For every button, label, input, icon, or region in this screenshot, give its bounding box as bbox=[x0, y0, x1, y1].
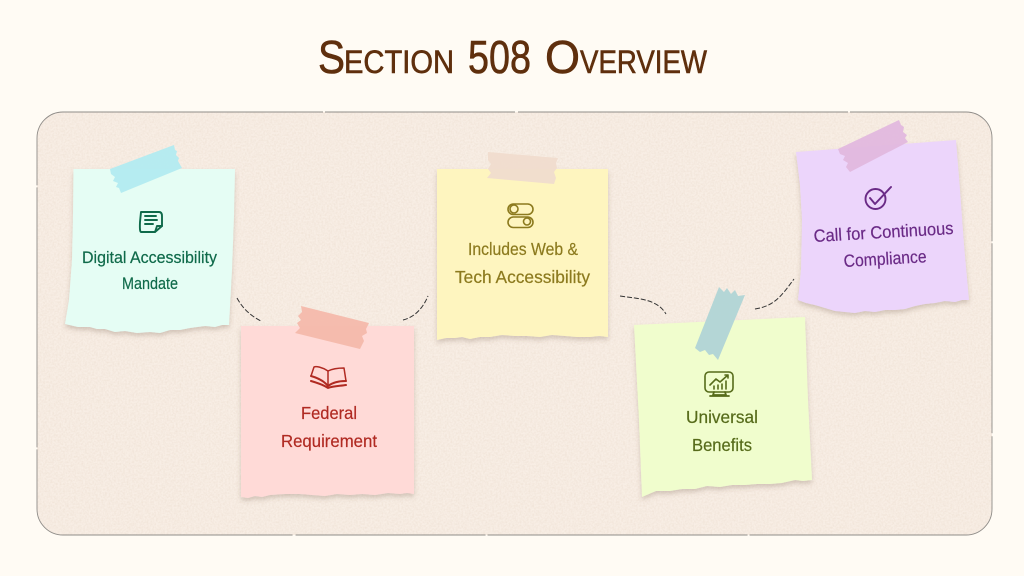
tape bbox=[487, 152, 558, 184]
connector: note 4 to note 5 bbox=[755, 279, 794, 309]
note paper bbox=[241, 326, 414, 498]
title: 508 bbox=[468, 31, 531, 83]
label: Universal bbox=[686, 407, 758, 427]
icon: check circle bbox=[866, 187, 891, 209]
label: Mandate bbox=[122, 274, 178, 293]
panel: note Call for Continuous Compliance bbox=[796, 120, 969, 313]
panel: note Includes Web and Tech Accessibility bbox=[437, 152, 608, 340]
label: Federal bbox=[301, 403, 357, 423]
title: ECTION bbox=[344, 44, 454, 80]
label: Digital Accessibility bbox=[82, 248, 217, 267]
tape bbox=[295, 306, 369, 349]
icon: monitor chart bbox=[705, 372, 733, 396]
label: Benefits bbox=[692, 435, 752, 455]
note paper bbox=[796, 140, 969, 313]
icon: document bbox=[140, 212, 162, 232]
label bbox=[813, 218, 954, 271]
connector: note 2 to note 3 bbox=[403, 296, 428, 320]
connector: note 3 to note 4 bbox=[620, 296, 666, 314]
label: Requirement bbox=[281, 431, 377, 451]
title: S bbox=[318, 31, 345, 83]
label line 2: Compliance bbox=[843, 246, 927, 271]
panel: note Federal Requirement bbox=[241, 306, 414, 498]
label: Includes Web & bbox=[468, 239, 578, 259]
panel: corkboard background bbox=[37, 112, 992, 535]
tape bbox=[695, 287, 745, 360]
icon: open book bbox=[311, 367, 346, 388]
icon: toggle switches bbox=[508, 204, 533, 228]
note paper bbox=[437, 169, 608, 340]
title: VERVIEW bbox=[580, 44, 708, 80]
title: O bbox=[545, 31, 580, 83]
connector: note 1 to note 2 bbox=[237, 298, 261, 321]
label: Tech Accessibility bbox=[455, 267, 590, 287]
note paper bbox=[65, 169, 235, 333]
panel: note Universal Benefits bbox=[634, 287, 812, 497]
tape bbox=[110, 145, 182, 193]
tape bbox=[838, 120, 908, 172]
note paper bbox=[634, 317, 812, 497]
label line 1: Call for Continuous bbox=[813, 218, 954, 246]
panel: note Digital Accessibility Mandate bbox=[65, 145, 235, 333]
